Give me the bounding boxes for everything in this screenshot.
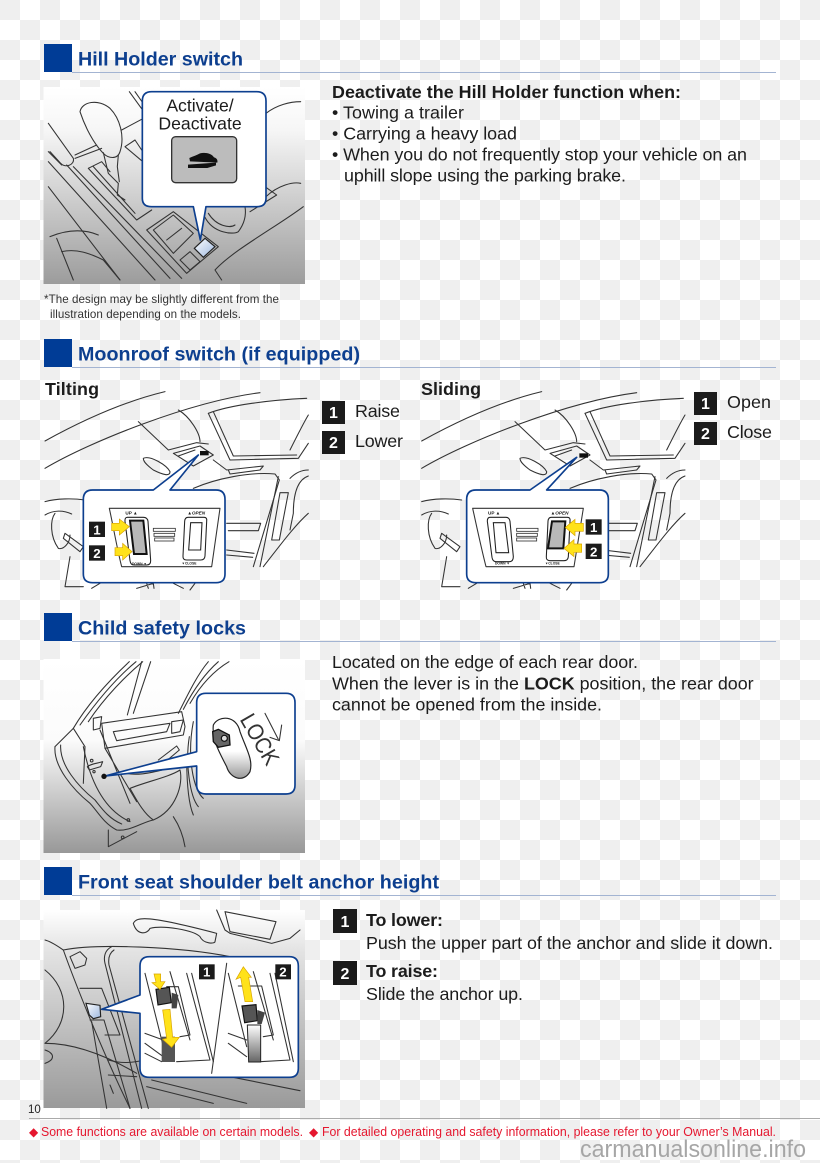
text block: lower and raise instructions: To raise: <box>366 961 438 981</box>
text block: child lock description: cannot be opened from the inside. <box>332 694 602 714</box>
section heading: Child safety locks <box>44 613 776 642</box>
callout: tilt switch <box>83 455 225 583</box>
marker 2 and arrow: 2 <box>590 544 597 559</box>
text block: deactivate conditions: • When you do not frequently stop your vehicle on an <box>332 144 747 164</box>
text block: deactivate conditions: Deactivate the Hill Holder function when: <box>332 82 681 102</box>
marker 1 and arrow <box>89 519 129 537</box>
footer notice: ◆ <box>309 1125 319 1139</box>
section heading: Hill Holder switch: Hill Holder switch <box>78 48 243 70</box>
text block: deactivate conditions: uphill slope using the parking brake. <box>344 166 626 186</box>
footnote: design may differ: illustration depending on the models. <box>50 308 241 321</box>
marker 2 <box>275 964 291 980</box>
panel: tilting <box>45 379 308 590</box>
callout: activate / deactivate <box>142 92 266 240</box>
panel: belt anchor illustration <box>44 910 305 1108</box>
section heading: Front seat shoulder belt anchor height: Front seat shoulder belt anchor height <box>78 872 439 894</box>
callout: tilt switch: UP ▲ <box>125 511 138 516</box>
interior line art <box>45 392 308 590</box>
anchor highlight <box>86 1003 101 1019</box>
text block: deactivate conditions: • Towing a trailer <box>332 102 464 122</box>
panel: hill holder console illustration <box>44 87 305 284</box>
text block: lower and raise instructions: Slide the anchor up. <box>366 984 523 1004</box>
text block: lower and raise instructions <box>333 909 773 1004</box>
footnote: design may differ: *The design may be slightly different from the <box>44 293 279 306</box>
text block: child lock description: When the lever is in the LOCK position, the rear door <box>332 674 754 694</box>
highlighted hill holder switch <box>194 238 215 257</box>
legend: sliding <box>694 392 772 445</box>
legend: tilting: 2 <box>329 435 338 452</box>
watermark: carmanualsonline.info <box>580 1136 806 1163</box>
section heading: Hill Holder switch <box>44 44 776 72</box>
legend: sliding: Open <box>727 392 771 412</box>
section heading: Front seat shoulder belt anchor height <box>44 867 776 896</box>
marker 1 and arrow <box>565 519 602 536</box>
text block: lower and raise instructions: To lower: <box>366 910 443 930</box>
interior line art <box>45 910 300 1108</box>
subheading: Tilting: Tilting <box>45 379 99 399</box>
raised position <box>228 967 293 1062</box>
marker 1 and arrow: 1 <box>93 522 101 537</box>
lock arrow <box>265 713 282 741</box>
legend: tilting: 1 <box>329 405 338 422</box>
footer notice: For detailed operating and safety information, please refer to your Owner’s Manual. <box>322 1125 776 1139</box>
legend: sliding: 2 <box>701 426 710 443</box>
lower position <box>145 972 213 1062</box>
callout: tilt switch: ▼CLOSE <box>182 562 197 566</box>
marker 2 and arrow <box>89 543 132 561</box>
lever <box>213 718 251 778</box>
marker 2 and arrow: 2 <box>93 546 101 561</box>
callout: slide switch: ▼CLOSE <box>545 561 561 565</box>
marker 1 <box>199 964 215 980</box>
marker 1 and arrow: 1 <box>590 520 598 535</box>
text block: lower and raise instructions: 1 <box>341 914 350 931</box>
callout: tilt switch: ▲OPEN <box>187 511 206 516</box>
text block: deactivate conditions <box>332 82 747 186</box>
footer notice <box>29 1125 776 1139</box>
callout: tilt switch: DOWN ▼ <box>132 562 147 566</box>
callout: anchor positions <box>102 957 298 1077</box>
interior line art <box>422 392 685 590</box>
legend: sliding: Close <box>727 422 772 442</box>
text block: lower and raise instructions: 2 <box>341 966 350 983</box>
callout: lock lever <box>101 693 295 794</box>
text block: lower and raise instructions: Push the upper part of the anchor and slide it down. <box>366 933 773 953</box>
marker 1: 1 <box>203 965 211 980</box>
panel: sliding <box>421 379 685 590</box>
gear lever and console line art <box>48 92 303 280</box>
door line art <box>55 662 229 847</box>
legend: tilting: Lower <box>355 431 403 451</box>
footer rule <box>29 1118 820 1120</box>
legend: sliding: 1 <box>701 396 710 413</box>
footer notice: ◆ <box>29 1125 39 1139</box>
callout: slide switch: DOWN ▼ <box>495 561 510 565</box>
marker 2: 2 <box>279 965 287 980</box>
callout: activate / deactivate: Activate/ <box>166 95 234 115</box>
subheading: Sliding: Sliding <box>421 379 481 399</box>
callout: slide switch: ▲OPEN <box>551 511 569 516</box>
section heading: Child safety locks: Child safety locks <box>78 618 246 640</box>
LOCK label: LOCK <box>235 709 285 769</box>
footer notice: Some functions are available on certain models. <box>41 1125 303 1139</box>
footnote: design may differ <box>44 293 279 321</box>
text block: deactivate conditions: • Carrying a heavy load <box>332 124 517 144</box>
callout: slide switch <box>467 457 608 583</box>
callout: slide switch: UP ▲ <box>488 511 500 516</box>
legend: tilting <box>322 401 403 454</box>
callout: activate / deactivate: Deactivate <box>158 114 242 134</box>
icon: car on slope <box>188 153 218 168</box>
text block: child lock description <box>332 652 754 714</box>
page number: 10 <box>28 1104 41 1116</box>
panel: child lock door illustration <box>44 659 305 853</box>
text block: child lock description: Located on the edge of each rear door. <box>332 652 638 672</box>
section heading: Moonroof switch <box>44 339 776 368</box>
section heading: Moonroof switch: Moonroof switch (if equipped) <box>78 344 360 366</box>
marker 2 and arrow <box>564 540 602 559</box>
legend: tilting: Raise <box>355 401 400 421</box>
